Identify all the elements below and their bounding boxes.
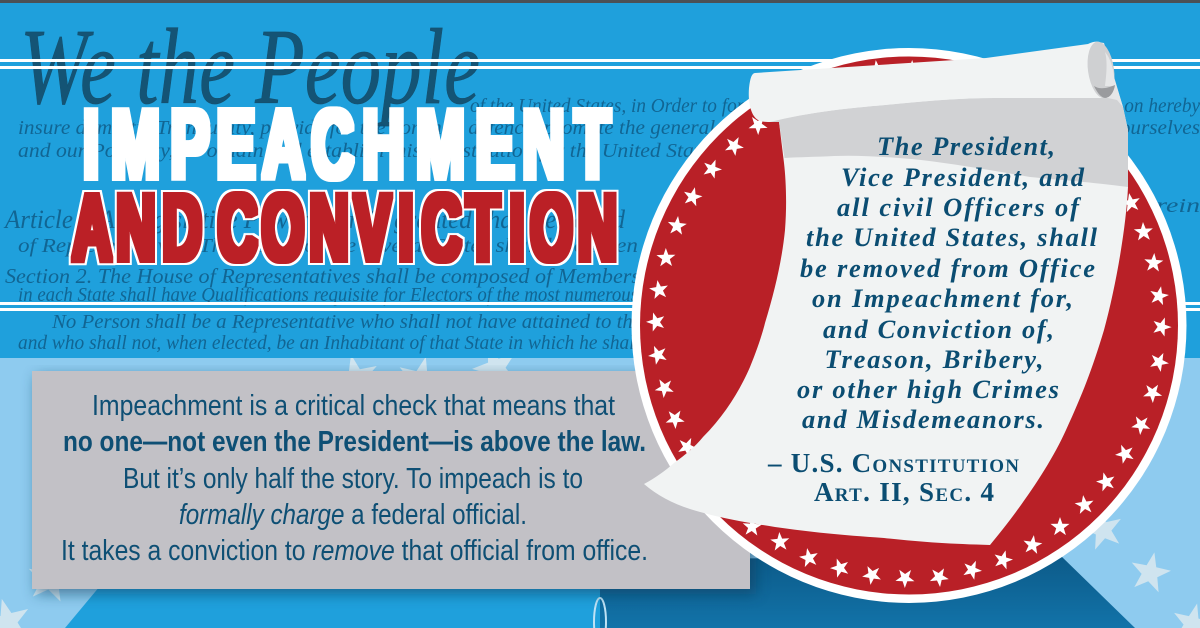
panel: red seal circle (632, 48, 1186, 603)
scroll shadow band (768, 98, 1128, 187)
handwritten constitution text: of Representatives. The House of the several States shall be chosen (18, 235, 638, 257)
panel: explanatory text box (32, 371, 756, 594)
text block: explanation: Impeachment is a critical check that means that (92, 390, 615, 422)
constitution quote: all civil Officers of (837, 192, 1082, 222)
handwritten constitution text: Article I. All legislative Powers herein granted shall be vested (3, 205, 626, 234)
scroll roll (749, 42, 1112, 122)
panel: light blue lower background (0, 338, 1200, 628)
citation (767, 448, 1019, 507)
white loop ornament (594, 598, 606, 628)
constitution quote: The President, (877, 131, 1055, 161)
constitution quote: and Conviction of, (823, 314, 1054, 344)
text block: explanation: But it’s only half the story. To impeach is to (123, 463, 583, 495)
title (72, 91, 617, 281)
constitution quote: or other high Crimes (797, 374, 1059, 404)
handwritten constitution text: herein (1130, 195, 1200, 217)
constitution quote: be removed from Office (800, 253, 1095, 283)
constitution quote: and Misdemeanors. (802, 404, 1044, 434)
top dark strip (0, 0, 1200, 3)
handwritten constitution text: insure domestic Tranquility, provide for the common defence, promote the general Welfare, and secure the Blessings of Liberty to ourselves (18, 117, 1200, 139)
ring of stars (646, 59, 1172, 588)
handwritten constitution text: in each State shall have Qualifications requisite for Electors of the most numerous (18, 284, 638, 306)
script heading: We the People: We the People (20, 8, 480, 127)
text block: explanation: It takes a conviction to remove that official from office. (61, 535, 648, 567)
title line: impeachment: IMPEACHMENT (83, 91, 610, 200)
blue dome (65, 580, 600, 628)
dark blue dome (600, 555, 1135, 628)
citation: – U.S. Constitution (767, 448, 1019, 478)
text block: explanation (61, 390, 648, 567)
handwritten constitution text (3, 95, 1200, 354)
pale stars (0, 338, 1200, 628)
constitution quote: the United States, shall (806, 222, 1098, 252)
constitution quote: Vice President, and (841, 162, 1085, 192)
scroll roll end (1084, 40, 1123, 107)
handwritten constitution text: and our Posterity, do ordain and establish this Constitution for the United States (18, 140, 718, 162)
constitution quote: Treason, Bribery, (824, 344, 1044, 374)
panel: blue constitution banner (0, 3, 1200, 358)
constitution quote (797, 131, 1098, 434)
handwritten constitution text: Section 2. The House of Representatives shall be composed of Members (5, 264, 640, 288)
constitution quote: on Impeachment for, (812, 283, 1073, 313)
citation: Art. II, Sec. 4 (814, 477, 994, 507)
handwritten constitution text: and who shall not, when elected, be an Inhabitant of that State in which he shall (18, 332, 640, 354)
text block: explanation: no one—not even the President—is above the law. (63, 426, 646, 458)
white double rules (0, 59, 1200, 311)
title line: and conviction: AND CONVICTION (72, 176, 617, 281)
panel: parchment scroll (644, 40, 1128, 545)
scroll paper (644, 43, 1128, 545)
text block: explanation: formally charge a federal official. (179, 499, 527, 531)
handwritten constitution text: No Person shall be a Representative who shall not have attained to the (51, 311, 642, 333)
